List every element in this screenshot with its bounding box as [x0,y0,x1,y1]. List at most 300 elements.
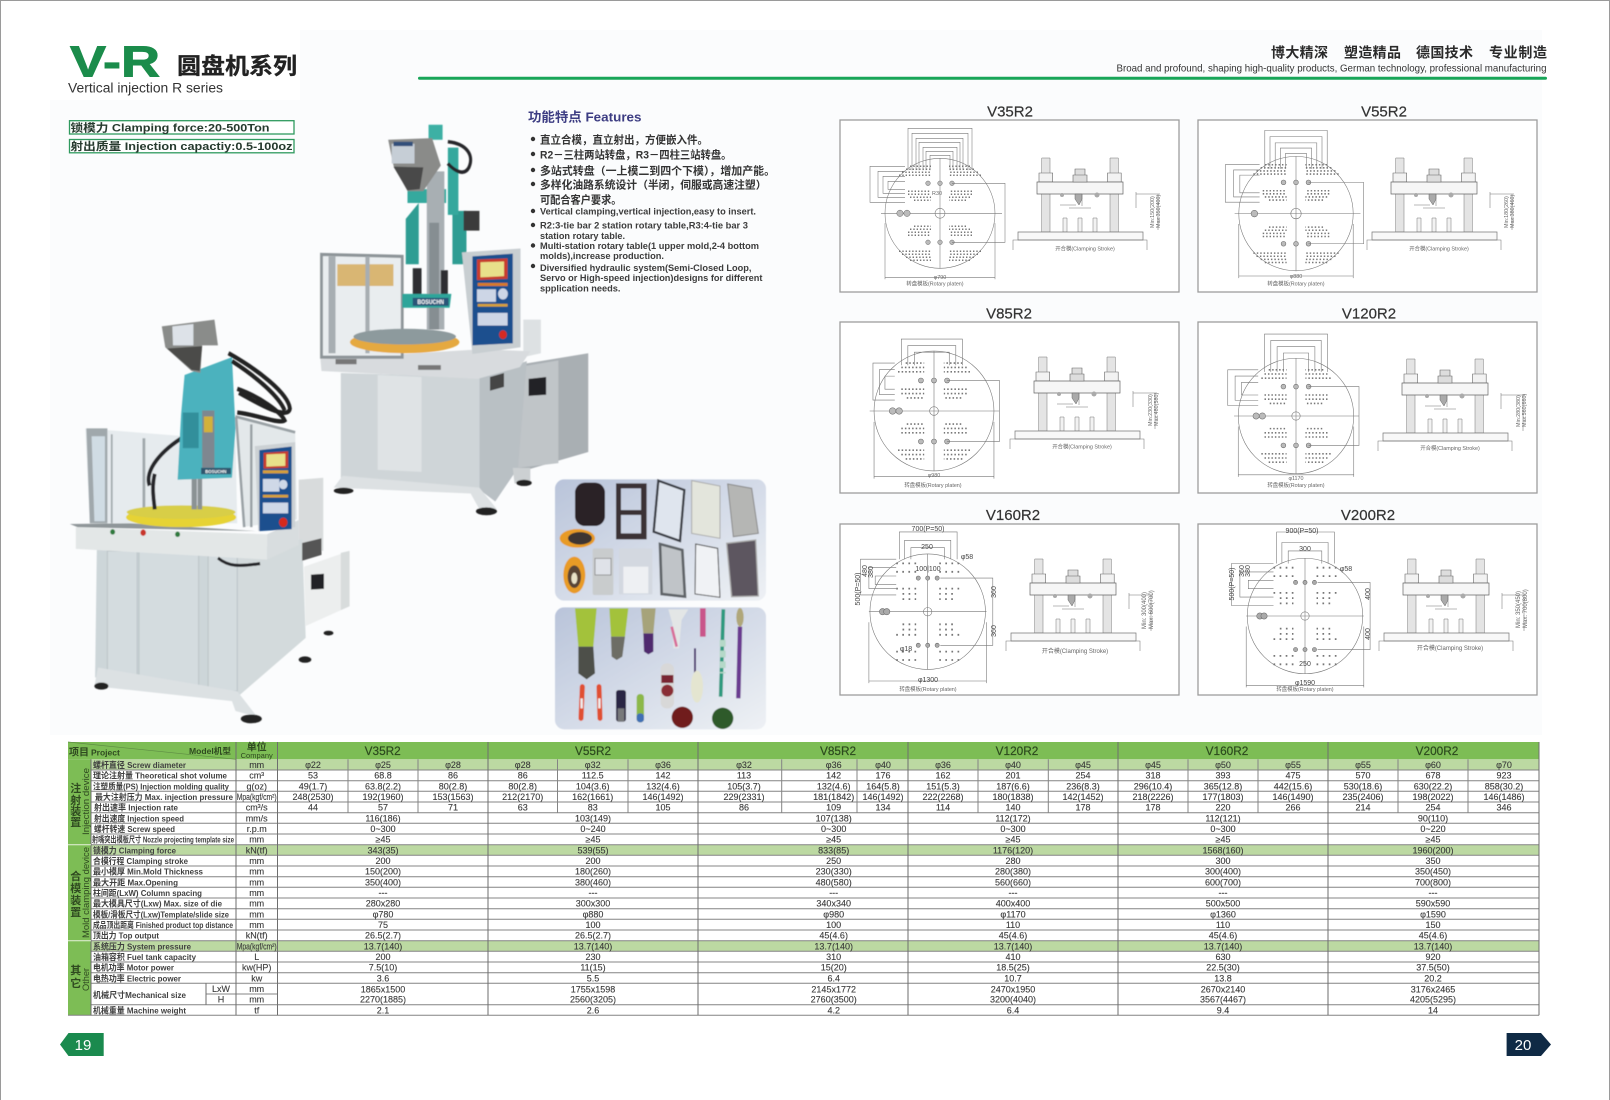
title block [68,38,297,96]
row: injection rate values: 71 [448,803,458,813]
row: max injection pressure values: 180(1838) [992,792,1034,802]
row: injection rate values: 105 [655,803,671,813]
section labels: Injection device [81,768,92,835]
parameter names: 注塑质量(PS) Injection molding quality [93,780,229,791]
unit column: kN(tf) [246,931,268,941]
row: injection rate values: 178 [1145,803,1161,813]
merged value rows: 1755x1598 [571,984,615,994]
drawing panel: V55R2 [1198,104,1537,292]
merged value rows: --- [1428,888,1438,898]
table header row: 单位 [247,740,267,754]
merged value rows: 26.5(2.7) [365,931,401,941]
merged value rows: φ780 [373,909,393,919]
row: screw diameter values: φ45 [1145,760,1161,770]
row: max injection pressure values: 146(1486) [1483,792,1525,802]
parameter names: 电热功率 Electric power [93,972,182,983]
drawing panel: V160R2 [840,507,1179,695]
frame and technical drawing: 开合模(Clamping Stroke) [1417,644,1483,652]
merged value rows: φ880 [583,909,603,919]
merged value rows: 343(35) [367,845,399,855]
parameter names: 柱间距(LxW) Column spacing [93,887,202,898]
row: max injection pressure values: 192(1960) [362,792,404,802]
unit column: mm [249,760,264,770]
row: injection molding quality values: 63.8(2.2) [365,781,401,791]
row: injection rate values: 57 [378,803,388,813]
parameter names [92,759,234,1015]
frame and technical drawing: Min:150(200) [1150,196,1156,228]
merged value rows: 13.7(140) [1414,941,1452,951]
row: injection rate values: 254 [1425,803,1441,813]
table header row: 项目 [69,746,89,758]
parameter names: 锁模力 Clamping force [93,844,176,855]
merged value rows: 4205(5295) [1410,994,1456,1004]
unit column: kw [251,973,263,983]
merged value rows: ≥45 [1426,835,1440,845]
section labels: 它 [70,976,81,990]
merged value rows: 150(200) [365,867,401,877]
merged value rows: 590x590 [1416,899,1450,909]
unit column [237,760,277,1015]
row: theoretical shot volume values: 86 [448,771,458,781]
row: injection molding quality values: 105(3.7) [727,781,761,791]
slogan English: Broad and profound, shaping high-quality products, German technology, professional manufacturing [1116,64,1547,74]
clamping force badge: 锁模力 Clamping force:20-500Ton [70,120,270,134]
frame and technical drawing: Min: 300(400) [1142,592,1148,629]
merged value rows: 11(15) [580,963,606,973]
frame and technical drawing: 500(P=50) [855,573,862,605]
row: theoretical shot volume values: 68.8 [374,771,392,781]
row: screw diameter values: φ60 [1425,760,1441,770]
row: injection rate values [308,803,1512,813]
drawing panel: V85R2 [840,306,1179,493]
parameter names: 射嘴突出模板尺寸 Nozzle projecting template size [92,834,234,845]
frame and technical drawing: 380 [868,566,875,578]
title V120R2: V120R2 [1342,306,1396,322]
merged value rows: 75 [378,920,388,930]
row: max injection pressure values: 222(2268) [922,792,964,802]
section labels: 装 [70,804,81,818]
merged value rows: 45(4.6) [999,931,1027,941]
frame and technical drawing: 480 [862,565,869,577]
unit column: Mpa(kgf/cm²) [237,792,277,802]
row: injection molding quality values: 104(3.6) [576,781,609,791]
row: max injection pressure values: 218(2226) [1132,792,1174,802]
unit column: kw(HP) [242,963,271,973]
row: max injection pressure values: 177(1803) [1202,792,1244,802]
section labels: Mold clamping device [81,847,92,938]
frame and technical drawing: 700(P=50) [912,526,944,533]
unit column: mm [249,835,264,845]
merged value rows: --- [829,888,838,898]
title V55R2: V55R2 [1361,104,1407,120]
table header row: Model机型 [189,746,231,756]
merged value rows: 13.7(140) [1204,941,1242,951]
frame and technical drawing: φ1170 [1288,476,1304,482]
parameter names: H [218,994,224,1004]
injection capacity badge: 射出质量 Injection capactiy:0.5-100oz [70,139,293,153]
row: theoretical shot volume values: 475 [1285,771,1301,781]
English feature list: R2:3-tie bar 2 station rotary table,R3:4-tie bar 3 [540,220,748,230]
frame and technical drawing [1198,322,1537,493]
unit column: tf [254,1005,260,1015]
frame and technical drawing: 转盘模板(Rotary platen) [899,685,957,693]
row: injection molding quality values: 442(15.6) [1274,781,1312,791]
merged value rows: 37.5(50) [1416,963,1450,973]
merged value rows: 920 [1425,952,1441,962]
unit column: Mpa(kgf/cm²) [237,941,277,951]
parameter names: 模板/滑板尺寸(Lxw)Template/slide size [93,908,229,919]
unit column: cm³/s [246,803,268,813]
English feature list: Vertical clamping,vertical injection,easy to insert. [540,206,756,216]
merged value rows: 13.7(140) [814,941,853,951]
merged value rows: 20.2 [1424,973,1442,983]
parameter names: 系统压力 System pressure [93,940,191,951]
merged value rows: φ1360 [1210,909,1236,919]
row: theoretical shot volume values: 113 [737,771,751,781]
parameter names: 成品顶出距离 Finished product top distance [93,919,233,930]
section labels: Other [81,968,92,991]
row: injection molding quality values: 630(22.2) [1414,781,1452,791]
unit column: mm [249,909,264,919]
merged value rows: 500x500 [1206,899,1240,909]
merged value rows: φ980 [823,909,844,919]
parameter names: 合模行程 Clamping stroke [93,855,188,866]
English feature list [540,206,762,293]
merged value rows: 300 [1215,856,1231,866]
table fills [68,742,1539,1015]
row: injection rate values: 114 [936,803,950,813]
page number 19 [60,1033,104,1056]
section labels [70,768,92,991]
slogan Chinese: 博大精深 [1271,44,1328,60]
merged value rows: 10.7 [1004,973,1022,983]
panel: toothbrushes and handles [555,607,766,729]
merged value rows: 3176x2465 [1411,984,1455,994]
merged value rows: 539(55) [577,845,609,855]
row: theoretical shot volume values: 86 [518,771,528,781]
row: screw diameter values: φ28 [445,760,461,770]
row: injection rate values: 83 [588,803,598,813]
merged value rows: --- [1218,888,1228,898]
row: theoretical shot volume values: 176 [875,771,891,781]
frame and technical drawing: 转盘模板(Rotary platen) [1267,481,1325,489]
row: max injection pressure values: 162(1661) [572,792,613,802]
merged value rows: 2670x2140 [1201,984,1245,994]
parameter names: 最大开距 Max.Opening [93,876,178,887]
frame and technical drawing: 转盘模板(Rotary platen) [1267,280,1325,288]
merged value rows: 480(580) [816,877,852,887]
section labels: 置 [70,906,81,919]
frame and technical drawing: φ790 [934,275,946,281]
series logo: V-R [70,38,160,86]
merged value rows: 13.7(140) [364,941,402,951]
unit column: mm [249,920,264,930]
title V160R2: V160R2 [986,507,1040,524]
unit column: mm [249,899,264,909]
panel: housings and frames [555,479,766,601]
row: theoretical shot volume values: 393 [1215,771,1231,781]
row: injection rate values: 140 [1005,803,1021,813]
title V85R2: V85R2 [986,306,1032,322]
merged value rows: 410 [1005,952,1021,962]
unit column: mm [249,867,264,877]
English feature list: Diversified hydraulic system(Semi-Closed Loop, [540,262,752,273]
row: injection molding quality values: 164(5.8) [866,781,900,791]
bullet marks [531,137,535,268]
frame and technical drawing: φ18 [900,646,912,653]
Chinese feature list [540,134,775,206]
specification table [68,740,1539,1015]
frame and technical drawing: 转盘模板(Rotary platen) [906,280,964,288]
unit column: L [254,952,259,962]
frame and technical drawing: 100|100 [915,566,941,573]
merged value rows: ≥45 [376,835,390,845]
page number 20 [1507,1033,1551,1056]
frame and technical drawing: 900(P=50) [1286,528,1318,535]
merged value rows: 310 [826,952,841,962]
merged value rows: 45(4.6) [819,931,848,941]
merged value rows: 6.4 [827,973,840,983]
frame and technical drawing: Min:280(380) [1516,395,1522,427]
section labels: 模 [70,881,81,895]
merged value rows: --- [378,888,388,898]
row: screw diameter values: φ55 [1285,760,1301,770]
frame and technical drawing: Max:350(400) [1156,195,1162,228]
section labels: 装 [70,893,81,907]
merged value rows: 230 [585,952,601,962]
row: theoretical shot volume values: 201 [1005,771,1021,781]
unit column: kN(tf) [246,845,268,855]
frame and technical drawing: Max: 600(700) [1149,590,1155,629]
merged value rows: 2760(3500) [811,994,857,1004]
merged value rows: 1865x1500 [361,984,405,994]
merged value rows: 0~300 [1210,824,1236,834]
parameter names: 理论注射量 Theoretical shot volume [93,770,227,781]
table grid [68,742,1539,1015]
section labels: 置 [70,816,81,829]
merged value rows: 200 [585,856,601,866]
merged value rows: 45(4.6) [1209,931,1237,941]
table header row: V120R2 [996,744,1038,758]
row: screw diameter values: φ36 [655,760,671,770]
merged value rows: 6.4 [1007,1005,1019,1015]
frame and technical drawing: 360 [991,625,998,637]
frame and technical drawing: φ58 [961,554,973,561]
merged value rows: 110 [1216,920,1230,930]
machine photo: rear machine: BOSUCHN [417,300,444,306]
Chinese feature list: 直立合模，直立射出，方便嵌入件。 [540,134,708,146]
row: injection molding quality values: 296(10.4) [1134,781,1172,791]
merged value rows: 250 [826,856,841,866]
frame and technical drawing: φ880 [1290,274,1302,280]
row: injection molding quality values: 187(6.6) [996,781,1030,791]
frame and technical drawing [840,524,1179,695]
merged value rows: 0~300 [821,824,846,834]
merged value rows: 630 [1215,952,1231,962]
frame and technical drawing: 400 [1365,588,1372,600]
row: injection rate values: 178 [1075,803,1091,813]
slogan Chinese [1271,44,1547,60]
merged value rows: 7.5(10) [369,963,397,973]
row: injection molding quality values [299,781,1523,791]
unit column: mm [249,877,264,887]
parameter names: 顶出力 Top output [93,930,159,941]
frame and technical drawing: 400 [1365,628,1372,640]
Chinese feature list: 多站式转盘（一上模二到四个下模），增加产能。 [540,164,775,178]
merged value rows: 112(172) [995,813,1031,823]
parameter names: LxW [212,984,231,994]
row: screw diameter values: φ36 [826,760,842,770]
clamping force badge [70,120,294,134]
parameter names: 射出速率 Injection rate [94,802,178,813]
merged value rows: 150 [1425,920,1441,930]
merged value rows: φ1590 [1420,909,1446,919]
merged value rows: 13.7(140) [574,941,612,951]
row: theoretical shot volume values: 142 [826,771,841,781]
section labels: 合 [70,869,81,883]
merged value rows: 116(186) [365,813,401,823]
row: injection molding quality values: 858(30.2) [1485,781,1523,791]
merged value rows: 0~240 [580,824,606,834]
row: injection rate values: 63 [518,803,528,813]
merged value rows: 26.5(2.7) [575,931,611,941]
row: screw diameter values: φ55 [1355,760,1371,770]
merged value rows: 13.8 [1214,973,1232,983]
frame and technical drawing: φ1300 [918,677,938,684]
frame and technical drawing [1198,120,1537,292]
features heading: 功能特点 Features [528,110,642,125]
merged value rows: 3567(4467) [1200,994,1246,1004]
merged value rows: 0~220 [1420,824,1446,834]
merged value rows: 3200(4040) [990,994,1036,1004]
row: screw diameter values: φ40 [875,760,891,770]
table header row: Project [91,748,120,758]
merged value rows: 100 [585,920,601,930]
merged value rows: 0~300 [1000,824,1026,834]
row: theoretical shot volume values: 142 [655,771,671,781]
row: max injection pressure values [292,792,1525,802]
row: injection molding quality values: 132(4.6) [817,781,850,791]
frame and technical drawing: Max:560(660) [1522,394,1528,427]
unit column: mm [249,888,264,898]
English feature list: Multi-station rotary table(1 upper mold,2-4 bottom [540,240,759,251]
merged value rows: 180(260) [575,867,611,877]
row: screw diameter values: φ70 [1496,760,1512,770]
page number 19: 19 [75,1037,91,1054]
parameter names: 机械重量 Machine weight [93,1004,186,1015]
spec badges [70,120,294,153]
merged value rows: 280x280 [366,899,400,909]
merged value rows: 280(380) [995,867,1031,877]
parameter names: 射出速度 Injection speed [94,812,184,823]
English feature list: station rotary table. [540,230,625,241]
merged value rows: 22.5(30) [1206,963,1240,973]
row: max injection pressure values: 146(1492) [642,792,684,802]
frame and technical drawing: 开合模(Clamping Stroke) [1042,647,1108,655]
row: max injection pressure values: 153(1563) [432,792,474,802]
merged value rows: 600(700) [1205,877,1241,887]
English feature list: spplication needs. [540,282,620,293]
row: theoretical shot volume values: 53 [308,771,318,781]
parameter names: 螺杆直径 Screw diameter [93,759,187,770]
row: theoretical shot volume values: 318 [1145,771,1161,781]
parameter names: 螺杆转速 Screw speed [94,823,175,834]
frame and technical drawing: Max:380(460) [1510,195,1516,228]
frame and technical drawing: 380 [1245,565,1252,577]
merged value rows: 340x340 [816,899,851,909]
Chinese feature list: 可配合客户要求。 [540,194,622,206]
merged value rows: ≥45 [1216,835,1230,845]
merged value rows: 15(20) [821,963,847,973]
unit column: cm³ [249,771,264,781]
merged value rows: 2.1 [377,1005,389,1015]
merged value rows: 2560(3205) [570,994,616,1004]
section labels: 其 [70,963,81,977]
row: screw diameter values: φ28 [515,760,531,770]
parameter names: 油箱容积 Fuel tank capacity [93,951,196,962]
English feature list: Servo or High-speed injection)designs for different [540,272,762,283]
row: max injection pressure values: 146(1492) [862,792,904,802]
merged value rows: 200 [375,952,391,962]
frame and technical drawing: 开合模(Clamping Stroke) [1409,244,1469,252]
merged value rows: 5.5 [587,973,599,983]
table header row: V35R2 [365,744,401,758]
machine photo: front machine [70,320,350,723]
merged value rows: ≥45 [1006,835,1020,845]
frame and technical drawing: φ980 [928,473,940,479]
row: injection molding quality values: 80(2.8) [508,781,537,791]
unit column: mm [249,984,264,994]
merged value rows: 1568(160) [1202,845,1244,855]
Chinese feature list: R2－三柱两站转盘，R3－四柱三站转盘。 [540,148,732,162]
table header row: V55R2 [575,744,611,758]
row: screw diameter values: φ40 [1005,760,1021,770]
merged value rows: ≥45 [826,835,841,845]
features text [528,110,775,293]
frame and technical drawing: 转盘模板(Rotary platen) [904,481,962,489]
row: theoretical shot volume values: 112.5 [582,771,604,781]
slogan Chinese: 专业制造 [1489,44,1547,60]
row: theoretical shot volume values [308,771,1512,781]
merged value rows: 4.2 [827,1005,840,1015]
page number 20: 20 [1515,1037,1531,1054]
merged value rows: 9.4 [1217,1005,1229,1015]
row: injection molding quality values: 151(5.3) [926,781,960,791]
row: injection rate values: 346 [1496,803,1512,813]
row: theoretical shot volume values: 254 [1075,771,1091,781]
frame and technical drawing: Min:230(330) [1148,394,1154,426]
frame and technical drawing [1198,524,1537,695]
frame and technical drawing: 开合模(Clamping Stroke) [1055,244,1115,252]
frame and technical drawing: 250 [921,544,933,551]
table header row: V200R2 [1416,744,1458,758]
row: injection rate values: 44 [308,803,318,813]
merged value rows: 103(149) [575,813,611,823]
machine photo: rear machine [320,125,588,515]
merged value rows: 1960(200) [1412,845,1454,855]
row: max injection pressure values: 248(2530) [292,792,334,802]
frame and technical drawing: φ58 [1340,566,1352,573]
merged value rows: 18.5(25) [996,963,1030,973]
merged value rows: 700(800) [1415,877,1451,887]
unit column: g(oz) [246,781,267,791]
row: injection molding quality values: 236(8.3) [1066,781,1100,791]
merged value rows: 14 [1428,1005,1438,1015]
row: screw diameter values: φ32 [585,760,601,770]
row: injection rate values: 86 [739,803,749,813]
merged value rows: 1176(120) [993,845,1033,855]
frame and technical drawing: R30 [932,191,942,197]
